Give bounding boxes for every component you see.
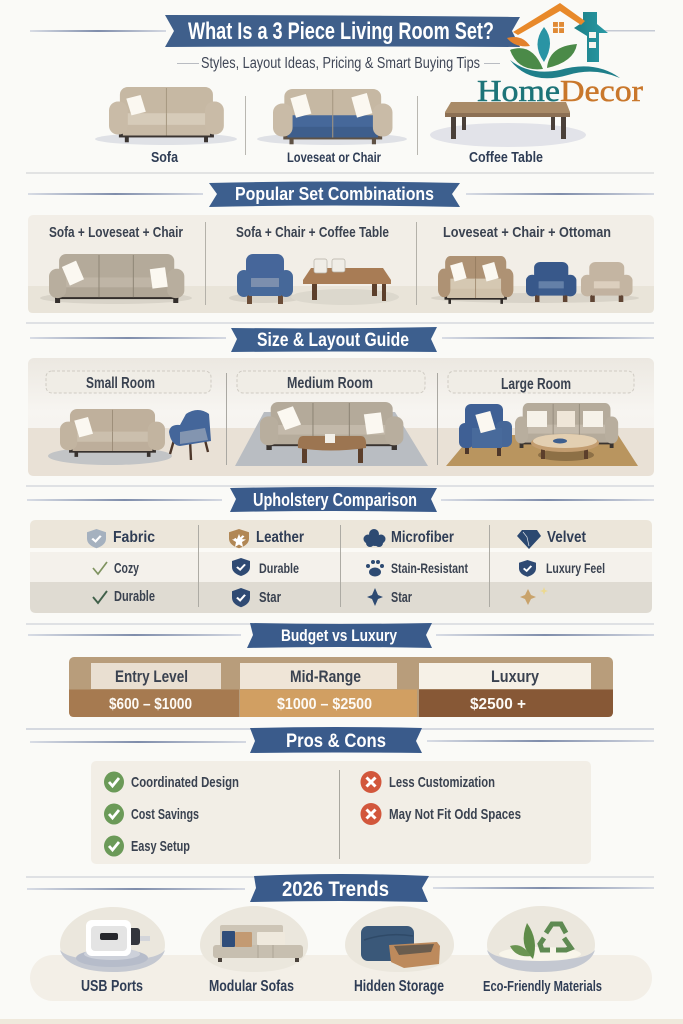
heading banner: 2026 Trends: [282, 878, 389, 901]
column: microfiber: [364, 529, 468, 606]
trend: usb ports: [60, 907, 165, 995]
logo house: [513, 3, 608, 62]
logo: [477, 3, 644, 108]
sofa item: [95, 87, 237, 166]
column: velvet: [517, 529, 605, 605]
heading banner: Upholstery Comparison: [253, 490, 417, 510]
tier: mid-range: [240, 663, 417, 717]
column: leather: Leather: [256, 529, 304, 546]
combo 3: [431, 224, 639, 304]
column: microfiber: Microfiber: [391, 529, 454, 546]
label: eco-friendly materials: Eco-Friendly Materials: [483, 979, 602, 995]
section: size and layout guide: [28, 327, 654, 476]
pro: easy setup: Easy Setup: [131, 838, 190, 855]
comparison table: [30, 520, 652, 613]
combo 1: Sofa + Loveseat + Chair: [49, 224, 183, 241]
heading banner: [230, 487, 437, 512]
column: leather: [229, 529, 304, 607]
column: velvet: Velvet: [547, 529, 587, 546]
small room: [46, 371, 211, 465]
section: pros and cons: [30, 727, 654, 864]
con: less customization: Less Customization: [389, 774, 495, 791]
pro: easy setup: [104, 836, 190, 856]
label: modular sofas: Modular Sofas: [209, 978, 294, 995]
panel: combinations: [28, 215, 654, 313]
trend: modular sofas: [200, 906, 308, 995]
section: popular set combinations: [28, 182, 654, 313]
con: less customization: [360, 771, 495, 793]
pro: cost savings: [104, 804, 199, 824]
heading banner: [250, 727, 422, 753]
tier: mid-range: Mid-Range: [290, 668, 361, 686]
tier: mid-range: $1000 – $2500: [277, 696, 372, 713]
tier: entry level: [69, 663, 239, 717]
small room: Small Room: [86, 375, 155, 392]
heading banner: Budget vs Luxury: [281, 626, 397, 645]
label: coffee table: Coffee Table: [469, 150, 543, 166]
combo 2: [229, 224, 399, 305]
trends bar: [30, 955, 652, 1001]
medium room: [235, 371, 428, 466]
trend: eco-friendly materials: [483, 906, 602, 995]
medium room: Medium Room: [287, 375, 373, 392]
title banner: What Is a 3 Piece Living Room Set?: [188, 18, 494, 45]
section: upholstery comparison: [27, 487, 654, 613]
con: may not fit odd spaces: [360, 803, 521, 825]
tier: luxury: [419, 663, 613, 717]
subtitle: Styles, Layout Ideas, Pricing & Smart Buying Tips: [201, 55, 480, 72]
coffee table item: [430, 102, 586, 166]
combo 2: Sofa + Chair + Coffee Table: [236, 224, 389, 241]
bottom strip: [0, 1019, 683, 1024]
label: usb ports: USB Ports: [81, 978, 143, 995]
column: microfiber: Star: [391, 590, 412, 606]
column: leather: Durable: [259, 560, 299, 576]
tier: entry level: $600 – $1000: [109, 696, 192, 713]
column: microfiber: Stain-Resistant: [391, 560, 468, 576]
label: sofa: Sofa: [151, 150, 179, 166]
column: velvet: Luxury Feel: [546, 560, 605, 576]
heading banner: Pros & Cons: [286, 731, 386, 752]
tier: luxury: Luxury: [491, 668, 540, 686]
panel: pros and cons: [91, 761, 591, 864]
section: budget vs luxury: [28, 623, 654, 717]
column: fabric: [87, 529, 155, 605]
combo 1: [40, 224, 192, 304]
heading banner: Popular Set Combinations: [235, 183, 434, 204]
column: fabric: Cozy: [114, 561, 139, 577]
heading banner: [247, 623, 432, 648]
panel: room sizes: [28, 358, 654, 476]
logo wave: [510, 60, 620, 78]
section: 2026 trends: [27, 874, 654, 1001]
title banner: [165, 15, 520, 47]
column: fabric: Durable: [114, 589, 155, 605]
label: hidden storage: Hidden Storage: [354, 978, 444, 995]
trend: hidden storage: [345, 906, 454, 995]
header section: [30, 3, 655, 166]
column: leather: Star: [259, 590, 281, 606]
con: may not fit odd spaces: May Not Fit Odd Spaces: [389, 806, 521, 823]
large room: [446, 371, 638, 466]
heading banner: Size & Layout Guide: [257, 330, 409, 351]
price table: [69, 657, 613, 717]
pro: cost savings: Cost Savings: [131, 806, 199, 823]
large room: Large Room: [501, 376, 571, 393]
pro: coordinated design: Coordinated Design: [131, 774, 239, 791]
loveseat item: [257, 89, 407, 165]
column: fabric: Fabric: [113, 529, 155, 546]
heading banner: [250, 874, 429, 902]
logo wordmark: HomeDecor: [477, 73, 644, 108]
combo 3: Loveseat + Chair + Ottoman: [443, 224, 611, 241]
pro: coordinated design: [104, 772, 239, 792]
label: loveseat or chair: Loveseat or Chair: [287, 149, 381, 165]
logo leaves: [507, 27, 577, 69]
tier: entry level: Entry Level: [115, 668, 188, 686]
tier: luxury: $2500 +: [470, 696, 526, 713]
